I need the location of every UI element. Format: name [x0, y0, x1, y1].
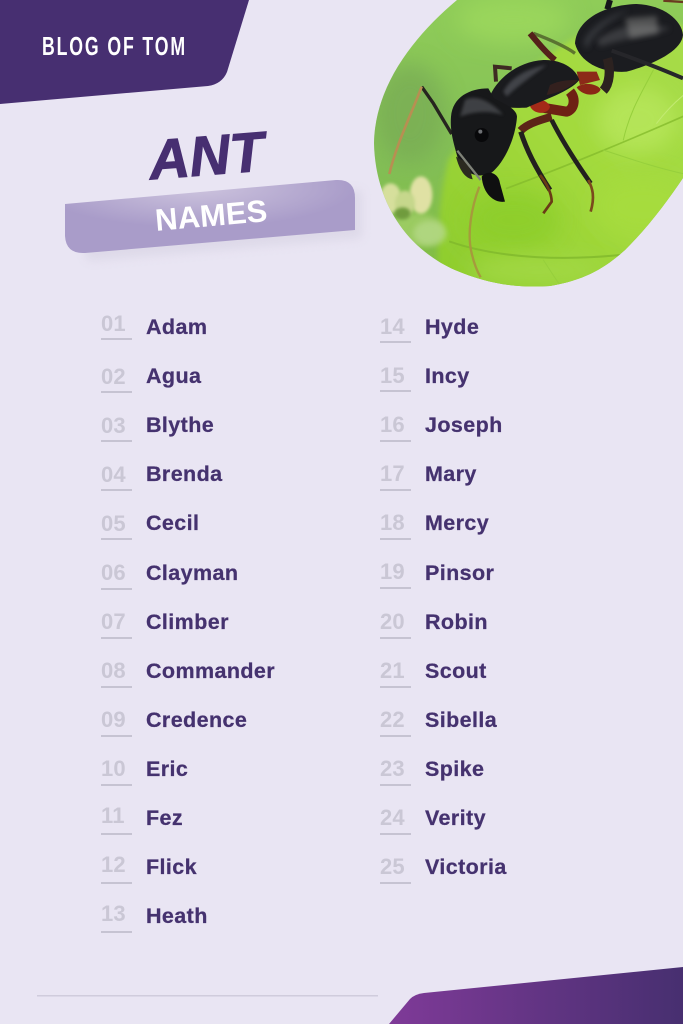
item 16: Joseph — [425, 413, 503, 437]
item 23: 23 — [380, 756, 405, 781]
item 20: Robin — [425, 610, 488, 634]
item 15: Incy — [425, 364, 470, 388]
item 19: 19 — [380, 559, 405, 584]
item 15 — [380, 363, 470, 392]
item 21: Scout — [425, 659, 487, 683]
item 14: 14 — [380, 314, 405, 339]
list: right column — [380, 314, 507, 884]
item 14 — [380, 314, 479, 343]
item 15: 15 — [380, 363, 405, 388]
item 01: 01 — [101, 311, 126, 336]
petiole red joints — [577, 72, 600, 85]
leaf — [438, 18, 683, 300]
item 25: 25 — [380, 854, 405, 879]
item 08: 08 — [101, 658, 126, 683]
item 24: Verity — [425, 806, 486, 830]
header banner — [0, 0, 249, 104]
title: ant: ANT — [147, 120, 266, 191]
item 10 — [101, 756, 188, 786]
head — [451, 88, 517, 175]
item 17: 17 — [380, 461, 405, 486]
item 19 — [380, 559, 494, 589]
back legs — [533, 33, 575, 53]
item 02: 02 — [101, 364, 126, 389]
item 23 — [380, 756, 484, 786]
item 06: 06 — [101, 560, 126, 585]
item 09: Credence — [146, 708, 247, 732]
names ribbon — [65, 180, 355, 253]
item 07 — [101, 609, 229, 639]
item 12: 12 — [101, 852, 126, 877]
item 18 — [380, 510, 489, 540]
leaf veins — [450, 70, 683, 285]
item 08 — [101, 658, 275, 688]
item 01: Adam — [146, 315, 207, 339]
gaster — [575, 4, 683, 72]
item 03: Blythe — [146, 413, 214, 437]
item 12 — [101, 852, 197, 884]
item 04 — [101, 462, 222, 491]
item 18: Mercy — [425, 511, 489, 535]
item 12: Flick — [146, 855, 197, 879]
item 23: Spike — [425, 757, 484, 781]
list: left column — [101, 311, 275, 933]
item 17 — [380, 461, 477, 491]
middle legs red — [537, 92, 574, 112]
item 09: 09 — [101, 707, 126, 732]
footer banner — [389, 967, 683, 1024]
item 16 — [380, 412, 503, 442]
eye — [475, 128, 489, 142]
item 11 — [101, 803, 183, 835]
item 22: Sibella — [425, 708, 497, 732]
item 07: 07 — [101, 609, 126, 634]
antennae — [422, 87, 452, 134]
item 22 — [380, 707, 497, 737]
item 13 — [101, 901, 208, 933]
item 08: Commander — [146, 659, 275, 683]
item 05: Cecil — [146, 511, 199, 535]
mandible — [482, 173, 505, 202]
item 14: Hyde — [425, 315, 479, 339]
item 05 — [101, 511, 199, 540]
item 18: 18 — [380, 510, 405, 535]
item 10: 10 — [101, 756, 126, 781]
item 13: Heath — [146, 904, 208, 928]
item 24: 24 — [380, 805, 405, 830]
names ribbon shadow — [72, 190, 362, 261]
item 25 — [380, 854, 507, 884]
item 04: Brenda — [146, 462, 222, 486]
lower legs — [521, 132, 550, 190]
item 21 — [380, 658, 487, 688]
item 17: Mary — [425, 462, 477, 486]
item 25: Victoria — [425, 855, 507, 879]
item 21: 21 — [380, 658, 405, 683]
item 09 — [101, 707, 247, 737]
brand name: BLOG OF TOM — [42, 31, 187, 61]
item 06 — [101, 560, 238, 590]
ant photo on leaf — [370, 0, 683, 300]
item 10: Eric — [146, 757, 188, 781]
item 01 — [101, 311, 207, 340]
item 11: Fez — [146, 806, 183, 830]
item 02 — [101, 364, 202, 393]
item 07: Climber — [146, 610, 229, 634]
item 19: Pinsor — [425, 561, 494, 585]
item 03: 03 — [101, 413, 126, 438]
item 16: 16 — [380, 412, 405, 437]
item 02: Agua — [146, 364, 201, 388]
thorax — [488, 60, 579, 108]
item 20: 20 — [380, 609, 405, 634]
leg across gaster — [612, 51, 683, 78]
flower buds — [380, 176, 447, 247]
item 22: 22 — [380, 707, 405, 732]
item 11: 11 — [101, 803, 125, 828]
item 04: 04 — [101, 462, 126, 487]
item 05: 05 — [101, 511, 126, 536]
item 13: 13 — [101, 901, 126, 926]
item 20 — [380, 609, 488, 639]
footer divider — [37, 995, 378, 996]
subtitle: names: NAMES — [154, 193, 269, 238]
item 03 — [101, 413, 214, 442]
item 06: Clayman — [146, 561, 238, 585]
item 24 — [380, 805, 486, 835]
